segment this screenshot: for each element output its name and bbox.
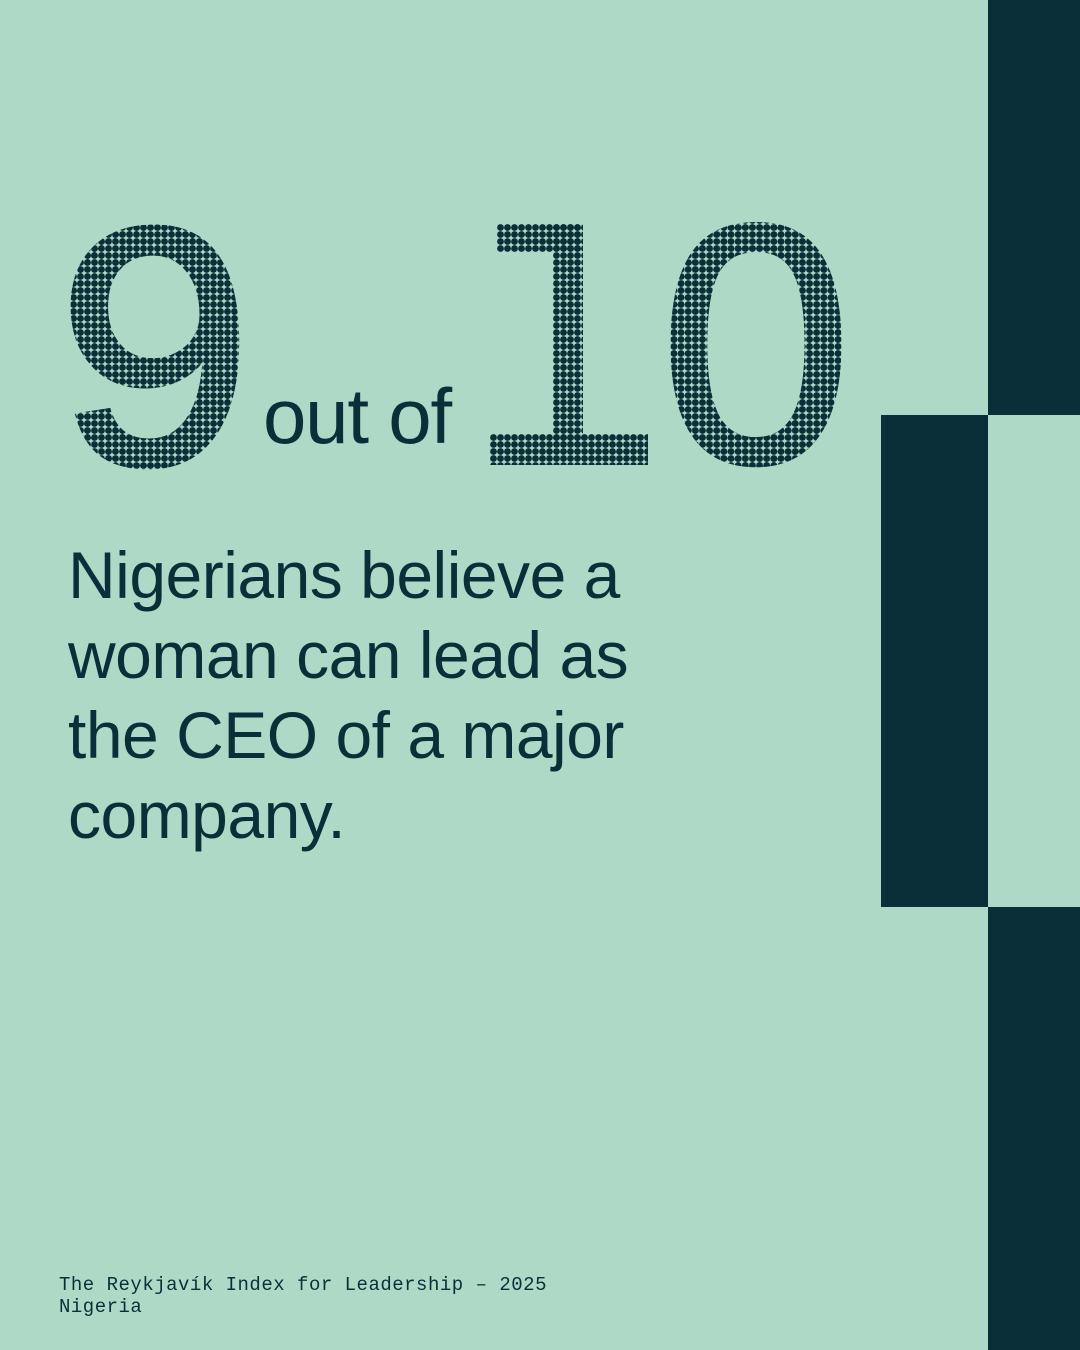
footer source: The Reykjavík Index for Leadership – 2025 Nigeria xyxy=(59,1274,547,1318)
body text: Nigerians believe a xyxy=(68,538,620,612)
headline stat: 9 out of 10 xyxy=(49,156,852,500)
body text xyxy=(68,538,628,852)
out of: out of xyxy=(263,372,452,460)
decorative block: middle xyxy=(881,415,988,907)
body text: the CEO of a major xyxy=(68,698,624,772)
body text: woman can lead as xyxy=(68,618,628,692)
decorative block: top right xyxy=(988,0,1080,415)
decorative block: bottom right xyxy=(988,907,1080,1350)
body text: company. xyxy=(68,778,345,852)
